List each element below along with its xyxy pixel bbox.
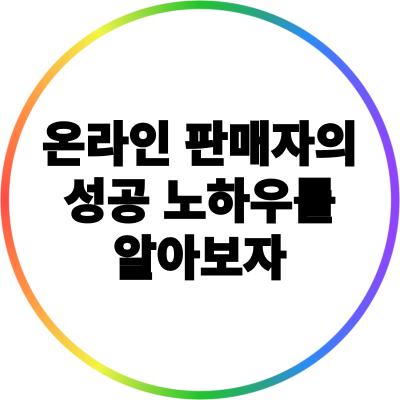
title line 2: 성공 노하우를 bbox=[64, 175, 336, 228]
title line 3: 알아보자 bbox=[114, 232, 286, 285]
title line 1: 온라인 판매자의 bbox=[42, 118, 358, 171]
